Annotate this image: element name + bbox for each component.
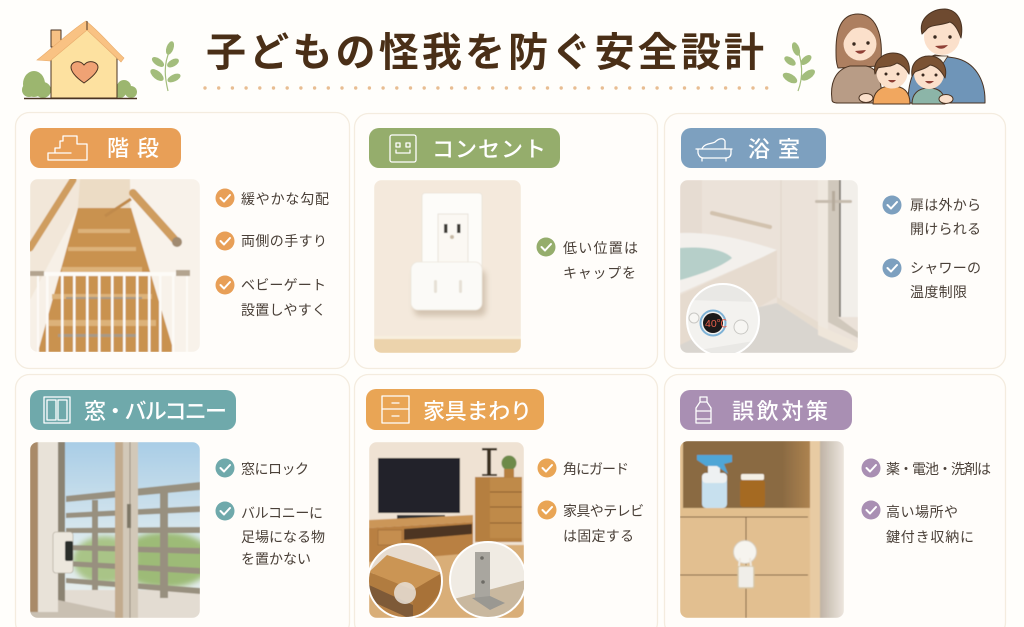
panel: 浴室 (664, 114, 1006, 368)
checklist: 浴室 (882, 196, 981, 300)
checklist: 誤飲対策: 鍵付き収納に (886, 529, 974, 545)
checklist: 階段: 両側の手すり (241, 233, 327, 249)
illustration: family (832, 9, 985, 104)
panel: 家具まわり (354, 374, 658, 627)
badge: 誤飲対策: 誤飲対策 (732, 399, 828, 424)
checklist: コンセント (536, 238, 638, 281)
panel: 誤飲対策 (664, 374, 1006, 627)
checklist: 家具まわり (538, 458, 644, 544)
panel: コンセント (354, 114, 658, 368)
checklist: 階段 (216, 188, 329, 318)
panel: 窓・バルコニー (16, 374, 350, 627)
badge: 窓・バルコニー: 窓・バルコニー (84, 399, 227, 424)
checklist: 浴室: 温度制限 (910, 284, 967, 300)
checklist: 家具まわり: は固定する (563, 528, 634, 544)
photo: bathroom (680, 180, 858, 353)
icon: leaf sprig left (148, 40, 182, 91)
photo: TV and furniture (369, 442, 524, 618)
inset: temperature dial: 40℃ (705, 318, 728, 330)
icon: house (22, 21, 137, 98)
checklist: 浴室: 開けられる (910, 221, 981, 237)
checklist: 窓・バルコニー: を置かない (241, 551, 311, 567)
photo: stairs with baby gate (30, 179, 200, 352)
checklist: 階段: 設置しやすく (241, 302, 326, 318)
photo: outlet with safety cap (374, 180, 521, 353)
checklist: 家具まわり: 家具やテレビ (563, 503, 644, 519)
badge: コンセント (369, 128, 560, 168)
badge: 誤飲対策 (680, 390, 852, 430)
checklist: 浴室: シャワーの (910, 260, 981, 276)
badge: 階段: 階段 (107, 136, 159, 161)
checklist: 階段: 緩やかな勾配 (241, 191, 329, 207)
checklist: 窓・バルコニー: バルコニーに (241, 505, 323, 521)
checklist: コンセント: 低い位置は (563, 240, 638, 256)
inset: temperature dial (687, 284, 760, 356)
dotted title underline (205, 86, 768, 90)
checklist: 誤飲対策: 高い場所や (886, 504, 958, 520)
badge: 窓・バルコニー (30, 390, 236, 430)
title: 子どもの怪我を防ぐ安全設計 (206, 31, 764, 75)
checklist: コンセント: キャップを (563, 265, 636, 281)
badge: 階段 (30, 128, 181, 168)
panel: 階段 (16, 112, 350, 368)
checklist: 階段: ベビーゲート (241, 277, 326, 293)
badge: 浴室 (681, 128, 826, 168)
checklist: 家具まわり: 角にガード (563, 461, 629, 477)
inset: corner guard (368, 544, 443, 620)
photo: window and balcony (30, 442, 213, 618)
checklist: 誤飲対策: 薬・電池・洗剤は (886, 461, 991, 477)
checklist: 窓・バルコニー (216, 458, 325, 567)
badge: 家具まわり (366, 389, 544, 430)
badge: 浴室: 浴室 (748, 137, 800, 162)
badge: コンセント: コンセント (432, 137, 546, 162)
checklist: 窓・バルコニー: 足場になる物 (241, 529, 325, 545)
checklist: 浴室: 扉は外から (910, 197, 981, 213)
inset: wall bracket (450, 542, 526, 618)
badge: 家具まわり: 家具まわり (423, 399, 532, 424)
checklist: 窓・バルコニー: 窓にロック (241, 461, 309, 477)
icon: leaf sprig right (781, 41, 817, 91)
checklist: 誤飲対策 (862, 458, 991, 545)
photo: cabinet with cleaner and medicine (680, 441, 844, 618)
